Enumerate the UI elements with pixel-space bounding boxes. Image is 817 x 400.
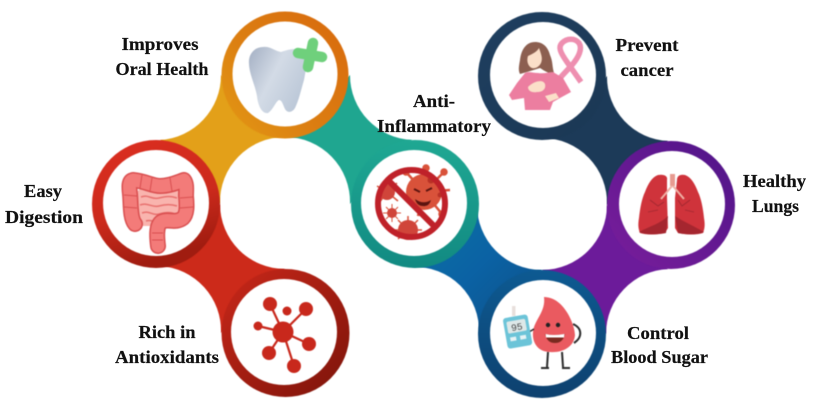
icon: molecule (254, 297, 316, 373)
icon: lungs (638, 174, 705, 234)
connector: blood sugar to lungs (542, 205, 668, 334)
label: Antioxidants (115, 347, 219, 367)
label: Lungs (752, 196, 799, 216)
label: Control (627, 323, 689, 343)
label: Inflammatory (377, 116, 491, 136)
meter reading: 95 (510, 321, 524, 334)
node: prevent cancer (478, 12, 678, 140)
ring (222, 12, 348, 138)
label: Oral Health (116, 59, 208, 79)
label: Improves (122, 34, 198, 54)
ring (478, 270, 606, 398)
icon: tooth with green cross (249, 43, 322, 113)
connector: cancer to lungs (542, 76, 668, 205)
ring (478, 12, 606, 140)
connector: oral health to anti-inflammatory (285, 75, 412, 204)
label: cancer (620, 60, 674, 80)
node: easy digestion (5, 140, 220, 268)
label: Digestion (5, 207, 83, 227)
ring (607, 141, 735, 269)
connector: digestion to antioxidants (160, 204, 285, 333)
node: control blood sugar (478, 270, 708, 398)
ring (222, 269, 350, 397)
connector: anti-inflammatory to blood sugar (412, 204, 542, 334)
label: Rich in (138, 322, 196, 342)
ring (92, 140, 220, 268)
connectors between circles (160, 75, 668, 334)
label: Anti- (413, 91, 455, 111)
node: anti-inflammatory (351, 91, 491, 268)
label: Healthy (743, 171, 806, 191)
icon: blood drop character with glucose meter (503, 297, 580, 368)
connector: oral health to digestion (160, 75, 285, 204)
icon: intestines (124, 175, 193, 246)
label: Prevent (616, 35, 678, 55)
node: improves oral health (116, 12, 348, 138)
ring (351, 140, 479, 268)
icon: woman with pink ribbon (509, 39, 581, 110)
icon: virus with prohibition sign (377, 166, 450, 240)
node: rich in antioxidants (115, 269, 350, 397)
label: Easy (24, 181, 62, 201)
label: Blood Sugar (611, 347, 708, 367)
node: healthy lungs (607, 141, 806, 269)
